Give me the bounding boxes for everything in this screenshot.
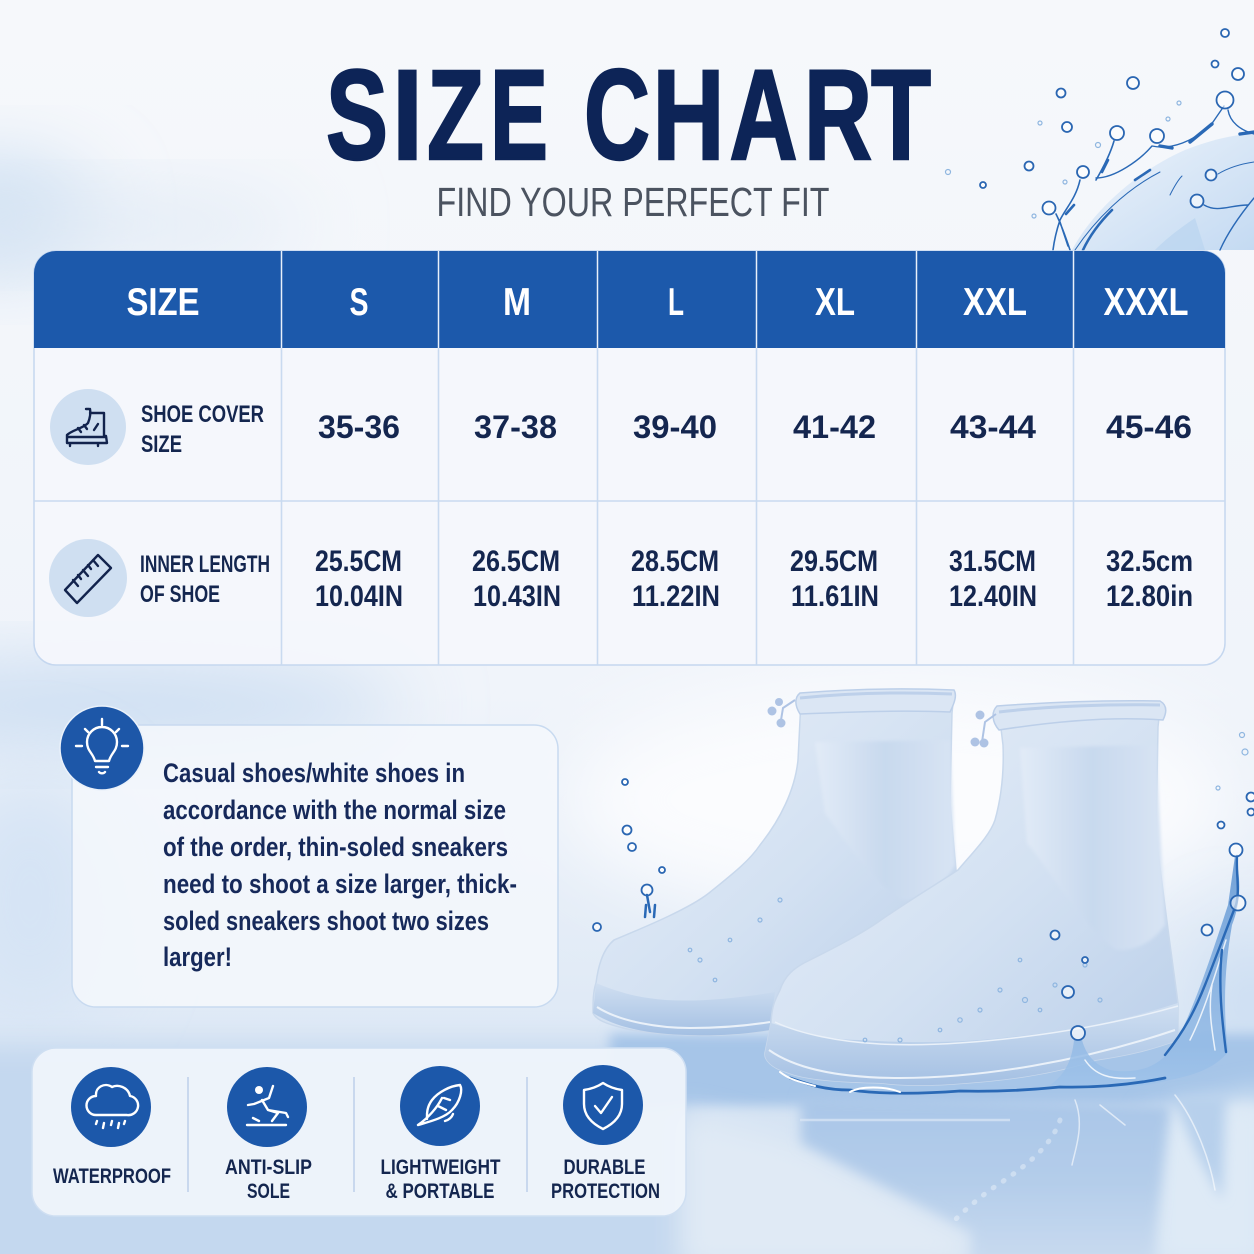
text block: sizing advice: accordance with the normal size — [163, 795, 506, 825]
row: inner length of shoe: 10.04IN — [315, 580, 403, 613]
row: shoe cover size: SHOE COVER — [141, 401, 264, 428]
title: S — [326, 44, 388, 187]
title: Z — [427, 44, 484, 187]
table body — [34, 251, 1225, 665]
row: inner length of shoe: 12.40IN — [949, 580, 1037, 613]
row: inner length of shoe — [49, 539, 1193, 617]
left shoe cover — [593, 689, 956, 1035]
drawstring toggle — [970, 710, 996, 748]
table header band: M — [503, 281, 531, 324]
icon: boot — [50, 389, 126, 465]
row: inner length of shoe: 32.5cm — [1106, 545, 1193, 578]
feature: waterproof — [53, 1067, 171, 1188]
table header band: L — [668, 281, 684, 324]
table header band: SIZE — [126, 281, 200, 324]
feature: anti-slip sole: SOLE — [247, 1180, 290, 1203]
feature: anti-slip sole: ANTI-SLIP — [225, 1156, 312, 1179]
row: shoe cover size: 35-36 — [318, 409, 400, 445]
row: inner length of shoe: 12.80in — [1106, 580, 1193, 613]
feature: durable protection: PROTECTION — [551, 1180, 660, 1203]
row: shoe cover size — [50, 389, 1192, 465]
title — [326, 44, 931, 187]
table header band: XXXL — [1104, 281, 1188, 324]
right shoe cover — [688, 701, 1178, 1085]
row: inner length of shoe: 26.5CM — [472, 545, 560, 578]
table header band: S — [350, 281, 368, 324]
row: inner length of shoe: 28.5CM — [631, 545, 719, 578]
text block: sizing advice — [163, 758, 517, 972]
water beads — [863, 958, 1102, 1042]
drawstring toggle — [768, 698, 795, 728]
text block: sizing advice: of the order, thin-soled sneakers — [163, 832, 508, 862]
table header band — [34, 251, 1225, 348]
subtitle: FIND YOUR PERFECT FIT — [436, 179, 830, 225]
icon: light bulb — [60, 706, 144, 790]
feature: durable protection — [551, 1065, 660, 1203]
feature: waterproof: WATERPROOF — [53, 1165, 171, 1188]
text block: sizing advice: need to shoot a size larger, thick- — [163, 869, 517, 899]
water reflections under boots — [800, 1095, 1226, 1254]
row: shoe cover size: 41-42 — [793, 409, 876, 445]
row: inner length of shoe: 11.22IN — [632, 580, 720, 613]
row: inner length of shoe: INNER LENGTH — [140, 551, 270, 578]
title: H — [652, 44, 724, 187]
feature: anti-slip sole — [225, 1067, 312, 1203]
row: shoe cover size: 45-46 — [1106, 409, 1192, 445]
row: inner length of shoe: 31.5CM — [949, 545, 1036, 578]
row: inner length of shoe: 29.5CM — [790, 545, 878, 578]
row: shoe cover size: 43-44 — [950, 409, 1036, 445]
row: inner length of shoe: 10.43IN — [473, 580, 561, 613]
size table — [34, 251, 1225, 665]
row: shoe cover size: 37-38 — [474, 409, 557, 445]
text block: sizing advice: soled sneakers shoot two sizes — [163, 906, 489, 936]
water band behind boots — [610, 1034, 1254, 1106]
row: shoe cover size: 39-40 — [633, 409, 717, 445]
row: inner length of shoe: OF SHOE — [140, 581, 220, 608]
features panel — [32, 1048, 686, 1216]
feature: durable protection: DURABLE — [564, 1156, 646, 1179]
title: T — [871, 44, 931, 187]
splash: top right crown — [946, 29, 1254, 250]
title: I — [392, 44, 423, 187]
row: inner length of shoe: 11.61IN — [791, 580, 879, 613]
table header band: XXL — [963, 281, 1027, 324]
text block: sizing advice: larger! — [163, 942, 232, 972]
icon: ruler — [49, 539, 127, 617]
row: shoe cover size: SIZE — [141, 431, 182, 458]
table header band: XL — [815, 281, 855, 324]
splash: right of boots and droplets — [593, 732, 1254, 1093]
text block: sizing advice: Casual shoes/white shoes in — [163, 758, 465, 788]
title: E — [490, 44, 548, 187]
row: inner length of shoe: 25.5CM — [315, 545, 402, 578]
title: A — [730, 44, 798, 187]
feature: lightweight and portable: LIGHTWEIGHT — [380, 1156, 501, 1179]
info card — [60, 706, 558, 1007]
feature: lightweight and portable: & PORTABLE — [386, 1180, 494, 1203]
title: R — [804, 44, 872, 187]
feature: lightweight and portable — [380, 1066, 501, 1203]
title: C — [584, 44, 650, 187]
